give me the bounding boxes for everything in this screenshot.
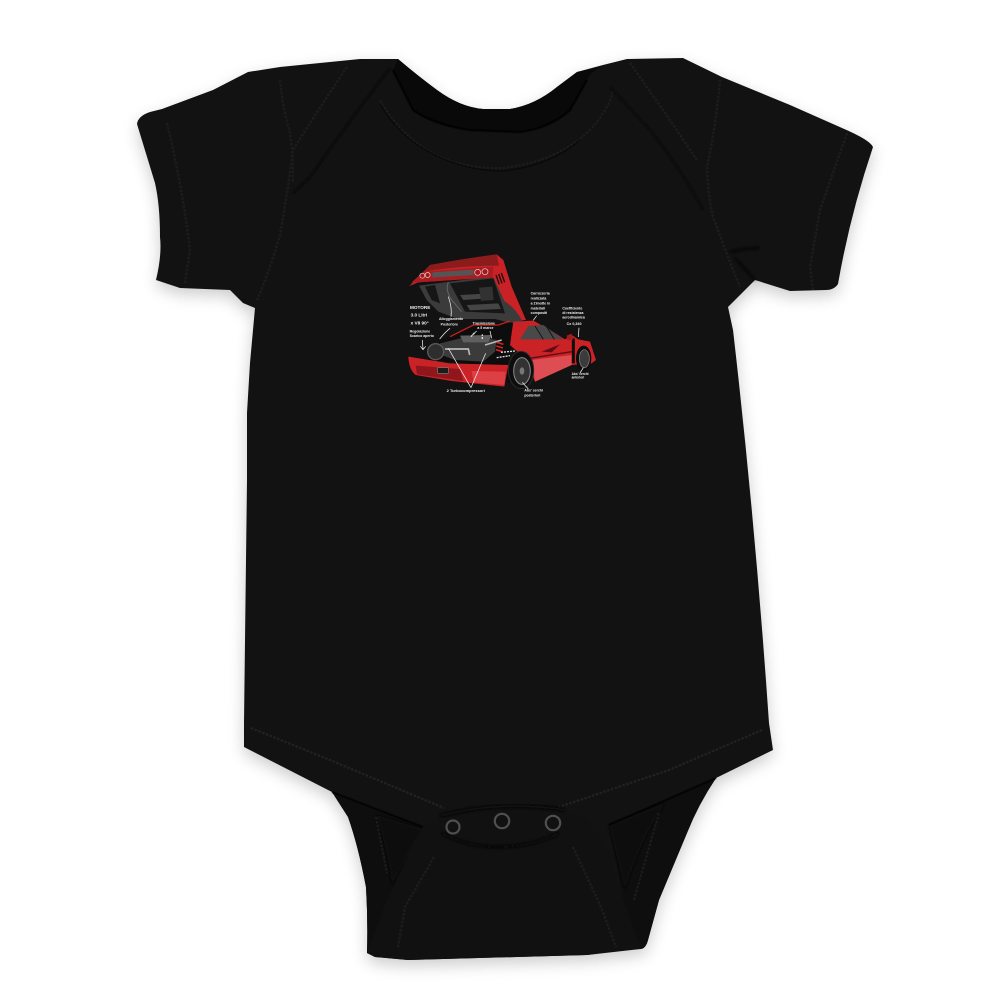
annotations: posteriori [524,393,540,397]
tail grille [432,270,473,278]
rear tyre [508,351,534,389]
annotations: materiali [531,307,545,311]
back neck inner [393,59,603,132]
turbo pipes [445,340,502,355]
bumper shade [416,366,463,381]
bay dark [428,322,512,383]
left sleeve cuff stitching [167,123,190,283]
rear wheel [508,351,534,389]
arrow: rear brake [522,382,528,389]
right arm seam [707,80,740,287]
leg seams [376,813,659,900]
intake manifold [460,335,492,342]
rear rim [514,358,530,384]
garment body silhouette [137,58,873,960]
leader arrows [420,297,583,389]
label: turbos: 2 Turbocompressori [447,388,485,393]
door shut line [569,338,578,363]
snap placket lower edge [441,833,559,847]
leg inner dark [376,803,665,890]
annotations: x V8 90° [411,320,429,325]
side intake [542,344,560,352]
side windows [520,325,563,339]
crotch flap [367,807,641,960]
label: housing: Alloggiamento [439,317,463,321]
label: drag coefficient: Coefficiente [562,307,582,311]
cover upper dark red [424,254,499,272]
bumper shape [408,357,508,387]
snap buttons [446,814,560,834]
white engine flecks [471,332,515,358]
snap left [446,820,460,834]
window pillar [535,326,554,339]
annotations: realizzata [531,297,546,301]
lower sill [532,355,572,382]
leg openings shadow [332,778,716,953]
snap right [546,816,560,830]
annotations: a Zimotte in [531,302,550,306]
cabin and front body [510,321,596,382]
left shoulder lap seam [257,67,347,300]
arrow: front brake [580,368,583,373]
arrow: turbos [448,348,486,388]
turbine left [428,344,444,360]
red engine frame [450,321,510,337]
tail lights right [475,269,488,275]
arrow: exhaust [420,340,426,350]
rear hub [520,367,524,375]
label: brakes front: Abs' cerchi [572,372,589,376]
licence plate [438,368,448,373]
arrow: housing [440,297,451,339]
front tyre [576,346,591,371]
front collar band edge [393,70,587,132]
red coilover spring [496,342,503,352]
annotations: anteriori [572,376,584,380]
garment shadow [137,64,873,966]
label: engine: MOTORE [410,305,430,310]
rear bumper [408,357,508,387]
left arm seam [280,80,293,183]
flap stitching [398,847,616,947]
hem lower edge [332,778,716,827]
left shoulder lap edge [293,68,390,193]
arrow: gearbox [472,331,492,338]
annotations: di resistenza [562,311,584,315]
bumper highlight [472,371,506,385]
onesie garment [137,58,873,960]
right shoulder lap seam [630,63,697,160]
right sleeve fold [730,248,760,280]
front rim [579,350,589,368]
label: gearbox: Trasmissione [473,321,495,325]
bottom hem stitching [251,728,762,808]
annotations: a 5 marce [477,326,493,330]
annotations: compositi [531,311,547,315]
printed graphic: exploded Ferrari F40 [408,254,596,397]
cover interior ribs [460,294,501,310]
tail panel [412,267,493,282]
right sleeve cuff stitching [810,133,847,290]
collar lower edge [380,104,580,171]
annotations: 3.0 Litri [411,313,427,318]
tail lights left [420,272,430,278]
cover interior curve [447,282,462,312]
arrow: bodywork [533,316,537,320]
snap centre [495,814,509,828]
label: exhaust: Regolazione [410,329,430,333]
mirror [567,334,573,340]
engine bay [428,321,515,383]
collar stitching [380,90,613,168]
label: brakes rear: Abs' cerchi [524,389,543,393]
engine block [440,336,497,362]
raised engine cover [409,254,526,323]
cover interior dark panels [425,278,505,313]
annotations: Posteriore [441,323,458,327]
annotations: aerodinamica [562,315,585,319]
cover interior window [479,287,494,301]
car body right side [510,321,596,382]
cover interior [419,276,525,323]
right shoulder lap edge [610,87,703,210]
sill shadow [530,352,572,358]
annotations [410,292,589,397]
arrow: drag [577,328,580,337]
annotations: Scarico aperto [410,334,434,338]
annotations: Cx 0,340 [567,322,582,326]
louvres [496,273,505,284]
cover top skin [409,254,526,320]
label: bodywork: Carrozzeria [531,292,550,296]
snap placket top shadow [440,806,565,816]
front wheel [576,346,591,371]
